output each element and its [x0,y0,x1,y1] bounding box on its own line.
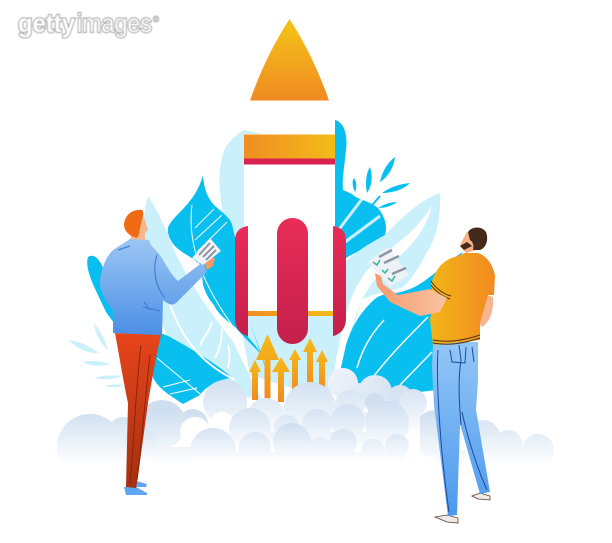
rocket body [244,134,335,316]
blue leaf: upper left [168,175,266,370]
man on the right [368,228,495,523]
blue leaf: lower left [87,256,232,404]
left man: hair [124,210,143,238]
right fin [333,226,346,336]
clouds: upper layer [203,380,427,472]
foliage behind the rocket [87,120,463,404]
left man: face and neck [130,214,148,243]
right man: back arm [478,295,493,327]
light leaf: left tall [143,196,262,400]
jeans seams [437,345,487,512]
clouds: white puffs [180,412,235,468]
paper lines [199,243,216,260]
left man: jacket [100,239,207,335]
blue leaf: upper right [335,120,386,262]
right man: checklist [368,247,409,287]
left side sprig [69,323,124,387]
checklist lines and ticks [373,250,406,281]
watermark: gettyimages: images [77,8,152,38]
veins: upper left leaf [191,205,232,325]
right man: jeans [432,342,490,516]
centre fin [277,218,308,344]
veins: lower right leaf [357,317,432,385]
left man: trousers [115,333,161,488]
rocket red band [244,158,335,164]
jacket folds [118,246,165,311]
rocket [235,19,346,344]
light leaf: right [335,193,440,367]
clouds: far layer [57,400,554,480]
clouds: middle layer [229,393,409,472]
right man: hair and beard [460,228,487,250]
left man: shoes [124,481,147,495]
rocket nose cone [250,19,329,100]
left man: paper [192,238,221,265]
blue leaf: lower right [340,252,463,392]
sprig: top right [353,157,410,210]
right man: forearm [375,273,447,316]
clouds: bright puffs [328,368,413,411]
trouser creases [130,345,150,484]
right man: face [460,232,478,253]
white veins: light leaf [170,305,235,380]
shirt stripes [431,281,480,344]
veins: upper right leaf [337,199,380,248]
watermark: gettyimages: getty [18,8,75,38]
clouds [57,368,554,480]
white vein: right light leaf [335,205,432,375]
right man: shoes [435,493,490,523]
rocket base strip [248,311,333,316]
exhaust arrows [249,334,328,402]
left man: hand [204,256,215,270]
veins: lower left leaf [157,358,205,398]
man on the left [100,210,221,495]
left fin [235,226,248,336]
watermark: gettyimages: ® [153,15,159,24]
rocket orange band [244,134,335,158]
clouds: front layer [122,423,409,476]
light leaf: centre back [219,130,345,400]
right man: shirt [430,253,495,345]
watermark: gettyimages [18,8,159,38]
